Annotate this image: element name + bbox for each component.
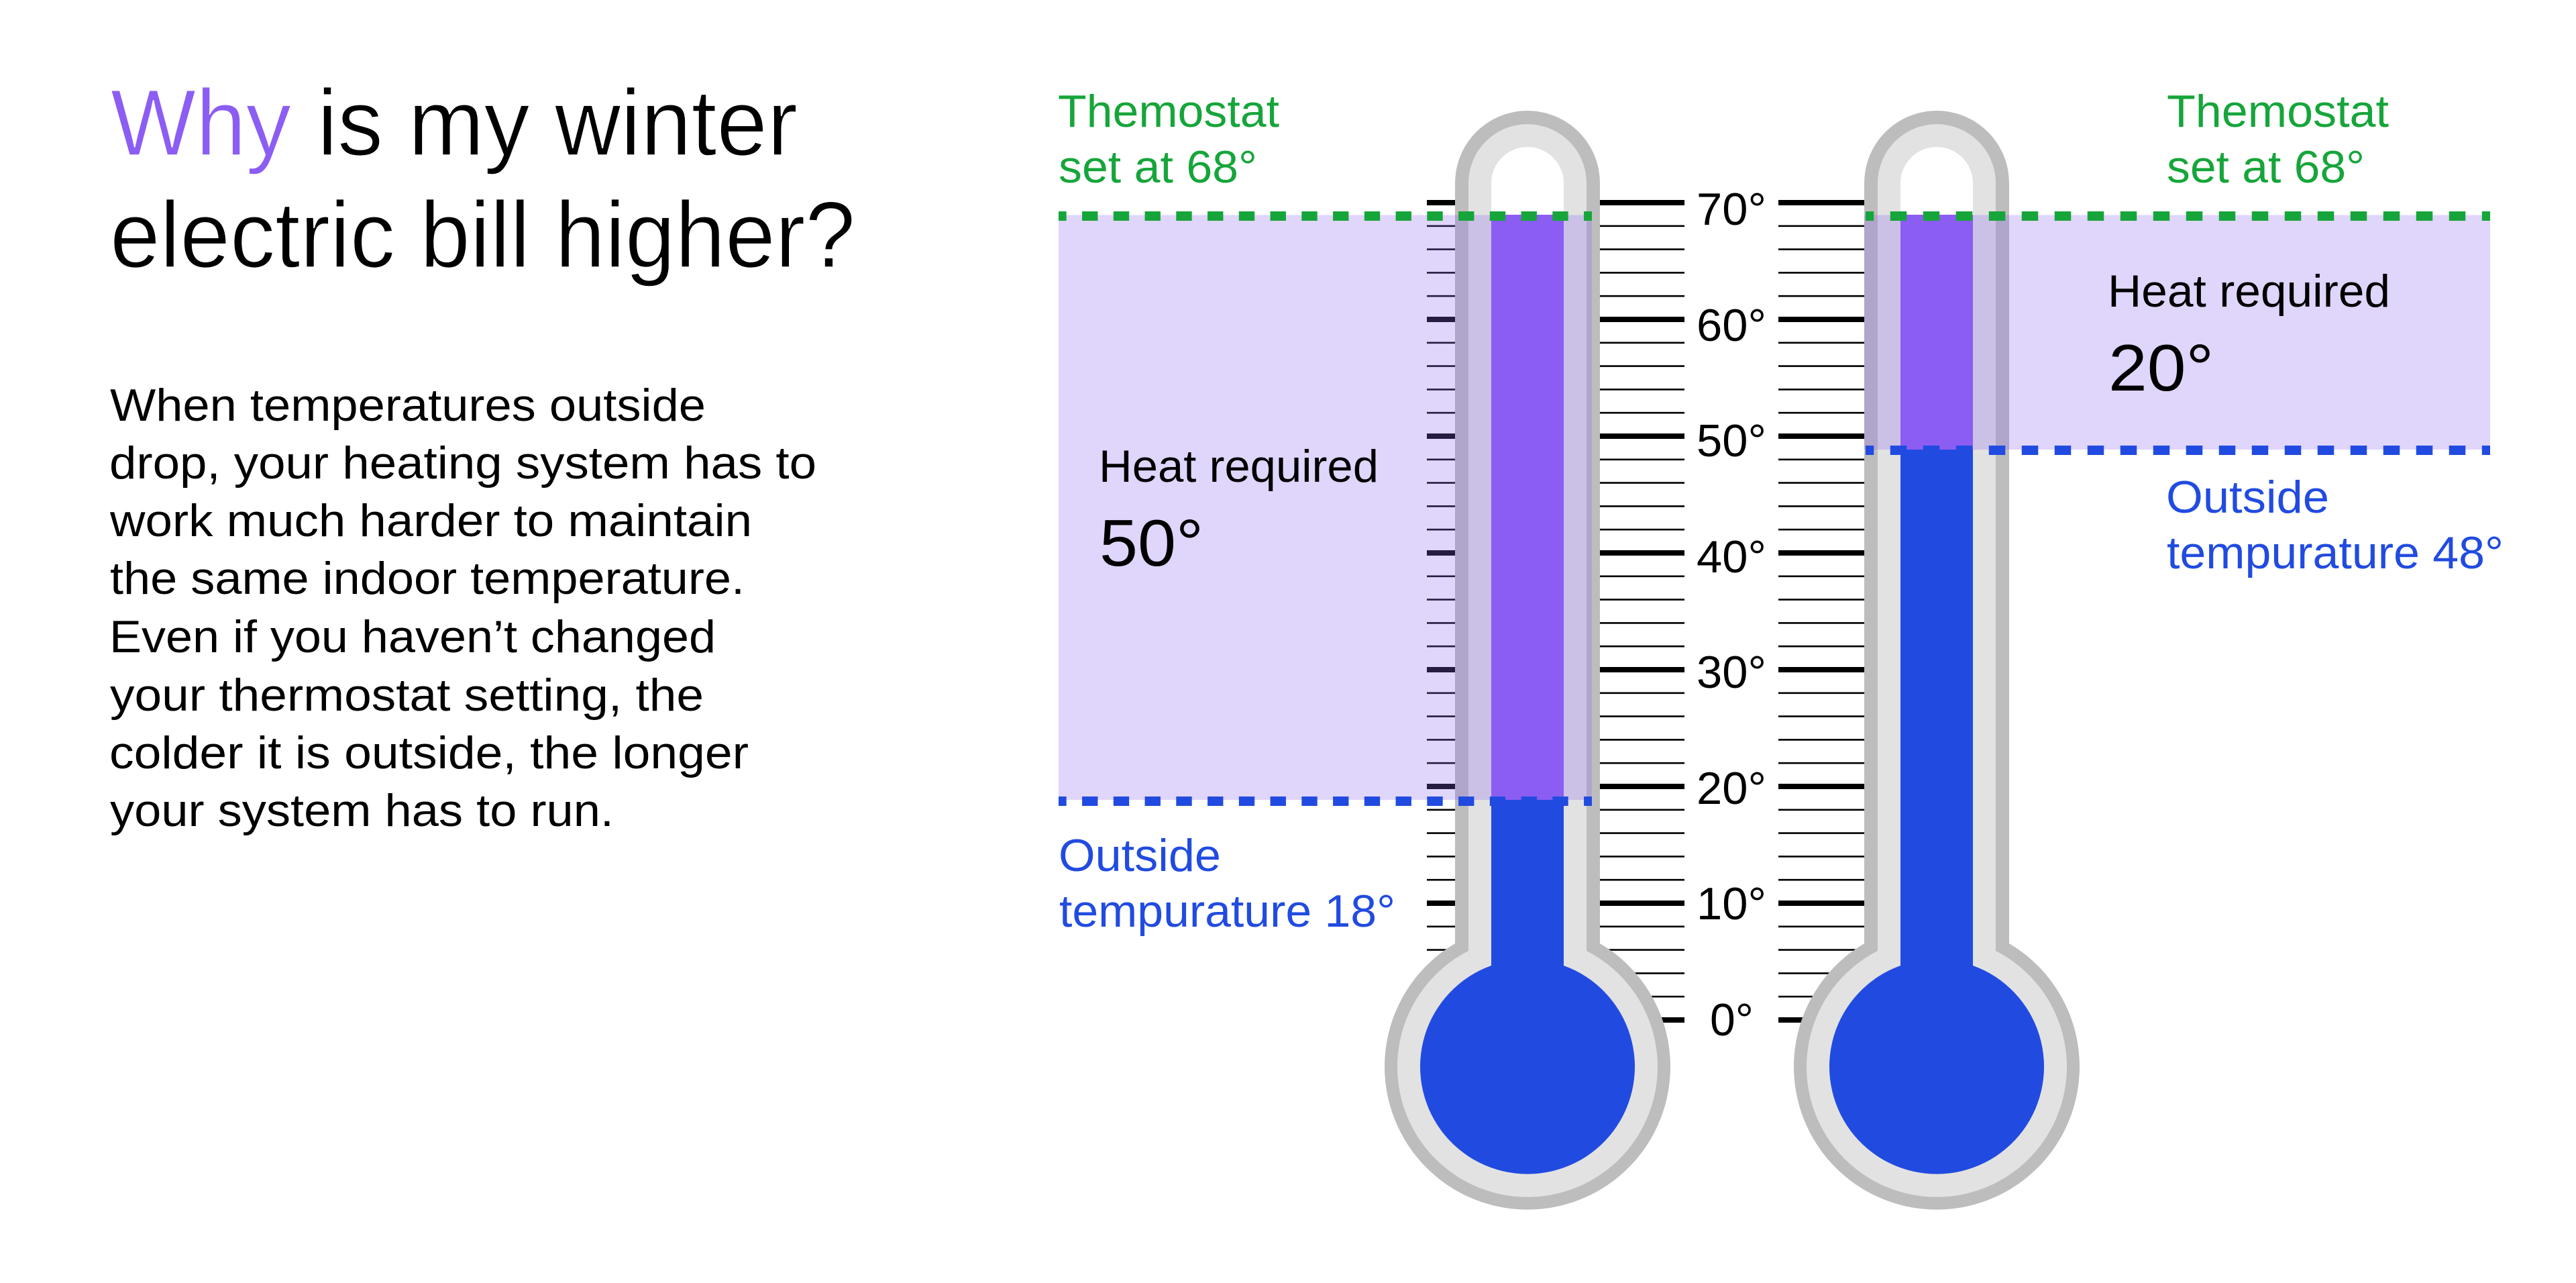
scale labels: 0° xyxy=(1710,994,1754,1045)
panel: heat required band left xyxy=(1059,215,1592,800)
title: Why xyxy=(111,70,291,175)
right purple tube section xyxy=(1900,215,1973,450)
scale labels: 60° xyxy=(1697,300,1766,351)
thermostat line left xyxy=(1059,211,1592,221)
left thermometer inner glass xyxy=(1397,124,1658,1197)
left purple tube section xyxy=(1491,215,1564,800)
thermostat label left: set at 68° xyxy=(1059,142,1257,193)
panel: heat required band right xyxy=(1864,215,2490,450)
thermostat label right: Themostat xyxy=(2167,86,2389,137)
body text: your thermostat setting, the xyxy=(110,670,704,721)
left thermometer empty tube xyxy=(1491,147,1564,221)
body text: Even if you haven’t changed xyxy=(109,611,716,662)
thermostat label left xyxy=(1058,86,1279,193)
heat required right xyxy=(2108,266,2390,405)
right thermometer empty tube xyxy=(1900,147,1973,221)
scale labels: 40° xyxy=(1697,531,1766,582)
thermostat label left: Themostat xyxy=(1058,86,1279,137)
thermostat label right: set at 68° xyxy=(2167,142,2365,193)
left thermometer mercury xyxy=(1420,799,1635,1174)
right thermometer mercury xyxy=(1829,448,2044,1174)
thermostat line right xyxy=(1866,211,2490,221)
body text: When temperatures outside xyxy=(110,380,706,431)
body text xyxy=(109,380,816,836)
title: electric bill higher? xyxy=(110,182,855,287)
heat required left: 50° xyxy=(1099,506,1203,580)
title xyxy=(110,70,855,287)
body text: colder it is outside, the longer xyxy=(109,727,749,778)
heat required left: Heat required xyxy=(1099,441,1379,492)
heat required right: Heat required xyxy=(2108,266,2390,317)
outside temperature label right: Outside xyxy=(2166,472,2329,523)
right thermometer xyxy=(1794,111,2080,1210)
body text: drop, your heating system has to xyxy=(109,438,816,489)
scale labels: 20° xyxy=(1697,763,1766,814)
body text: the same indoor temperature. xyxy=(110,553,745,604)
outside temperature line left xyxy=(1059,797,1592,806)
outside temperature line right xyxy=(1866,446,2490,455)
right thermometer inner glass xyxy=(1807,124,2067,1197)
scale labels: 50° xyxy=(1697,415,1766,466)
temperature scale ticks xyxy=(1427,203,1864,1020)
heat required left xyxy=(1099,441,1379,580)
scale labels: 30° xyxy=(1697,647,1766,698)
title: is my winter xyxy=(317,70,798,175)
scale labels xyxy=(1697,184,1766,1045)
body text: work much harder to maintain xyxy=(109,495,752,546)
outside temperature label left: Outside xyxy=(1059,830,1221,881)
left thermometer xyxy=(1385,111,1670,1210)
right thermometer casing xyxy=(1794,111,2080,1210)
outside temperature label left xyxy=(1059,830,1395,937)
scale labels: 10° xyxy=(1697,878,1766,929)
heat required right: 20° xyxy=(2108,331,2214,405)
body text: your system has to run. xyxy=(110,785,614,836)
outside temperature label left: tempurature 18° xyxy=(1059,886,1395,937)
outside temperature label right xyxy=(2166,472,2504,578)
thermostat label right xyxy=(2167,86,2389,193)
left thermometer casing xyxy=(1385,111,1670,1210)
outside temperature label right: tempurature 48° xyxy=(2167,527,2504,578)
scale labels: 70° xyxy=(1697,184,1766,235)
